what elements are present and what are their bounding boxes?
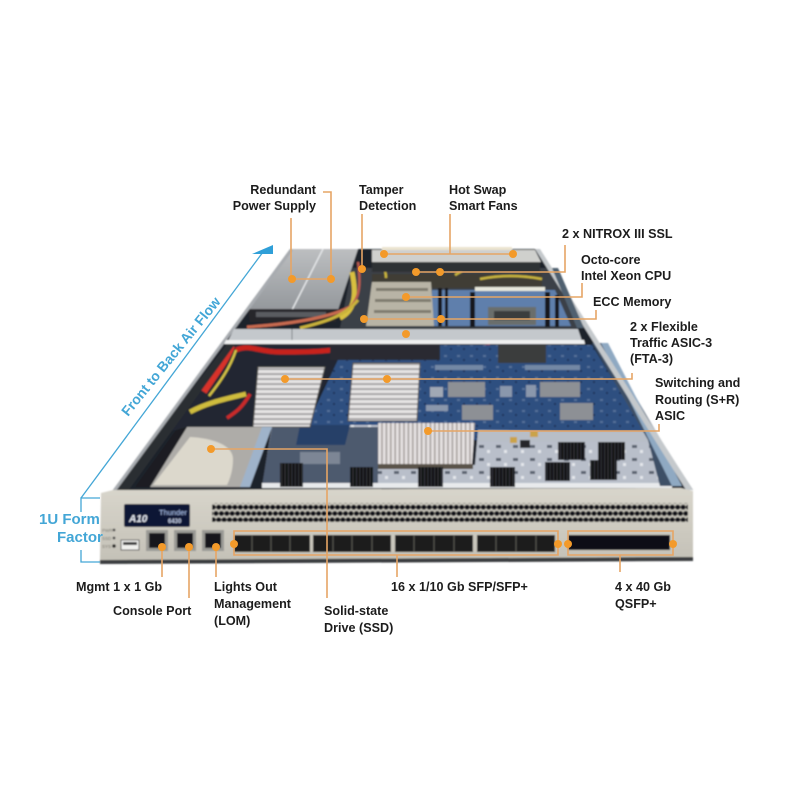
- label: switching and routing asic: Routing (S+R): [655, 393, 739, 407]
- label: nitrox: 2 x NITROX III SSL: [562, 227, 673, 241]
- orange callout dots: [158, 250, 677, 551]
- main board: [300, 345, 650, 440]
- label: lights out management: (LOM): [214, 614, 250, 628]
- label: mgmt port: Mgmt 1 x 1 Gb: [76, 580, 162, 594]
- label: switching and routing asic: ASIC: [655, 409, 685, 423]
- display badge: A10: [128, 514, 148, 525]
- solid-state drive: [135, 427, 272, 487]
- black heat sinks: [280, 442, 625, 487]
- right side rail: [535, 249, 693, 490]
- label: switching and routing asic: Switching and: [655, 376, 740, 390]
- label: tamper detection: Tamper: [359, 183, 404, 197]
- label: ecc memory: ECC Memory: [593, 295, 671, 309]
- 1U form factor label: 1U Form: [39, 511, 100, 528]
- lower board area: [262, 425, 672, 488]
- front panel: [100, 488, 693, 564]
- label: qsfp ports: QSFP+: [615, 597, 657, 611]
- label: fta-3: Traffic ASIC-3: [630, 336, 712, 350]
- label: console port: Console Port: [113, 604, 192, 618]
- label: qsfp ports: 4 x 40 Gb: [615, 580, 671, 594]
- label: lights out management: Management: [214, 597, 292, 611]
- status LEDs: [102, 528, 116, 549]
- status LEDs: PWR: [102, 528, 113, 533]
- 1U form factor label: Factor: [57, 529, 103, 546]
- label: hot swap smart fans: Hot Swap: [449, 183, 507, 197]
- label: redundant power supply: Redundant: [250, 183, 317, 197]
- display badge: [124, 504, 190, 527]
- display badge: 6430: [168, 519, 182, 525]
- 1U bracket: [81, 498, 100, 562]
- left cable bay: [160, 343, 490, 432]
- cross bar: [224, 329, 585, 344]
- power supplies: [247, 249, 359, 328]
- label: fta-3: 2 x Flexible: [630, 320, 698, 334]
- display badge: Thunder: [159, 508, 187, 517]
- ventilation holes: [212, 503, 688, 522]
- status LEDs: SSD: [102, 536, 112, 541]
- heat sink 3: [378, 423, 475, 469]
- orange callout lines: [162, 192, 673, 598]
- QSFP ports: [568, 535, 670, 550]
- left side rail: [112, 249, 293, 491]
- label: lights out management: Lights Out: [214, 580, 278, 594]
- air flow arrow: [81, 245, 273, 498]
- status LEDs: SYS: [102, 544, 111, 549]
- rear motherboard section: [340, 265, 578, 328]
- server chassis photo: [100, 247, 693, 564]
- USB port: [121, 540, 139, 550]
- label: tamper detection: Detection: [359, 199, 416, 213]
- label: redundant power supply: Power Supply: [233, 199, 316, 213]
- label: hot swap smart fans: Smart Fans: [449, 199, 518, 213]
- label: sfp ports: 16 x 1/10 Gb SFP/SFP+: [391, 580, 528, 594]
- label: octo-core cpu: Octo-core: [581, 253, 640, 267]
- label: fta-3: (FTA-3): [630, 352, 673, 366]
- label: solid-state drive: Drive (SSD): [324, 621, 393, 635]
- chassis body: [113, 249, 693, 491]
- heat sink 1: [253, 367, 325, 427]
- label: solid-state drive: Solid-state: [324, 604, 388, 618]
- heat sink 2: [348, 363, 420, 421]
- RJ45 ports: [146, 530, 224, 551]
- air flow label: Front to Back Air Flow: [118, 294, 224, 419]
- label: octo-core cpu: Intel Xeon CPU: [581, 269, 671, 283]
- SFP ports: [234, 535, 555, 552]
- fan bar: [372, 247, 541, 272]
